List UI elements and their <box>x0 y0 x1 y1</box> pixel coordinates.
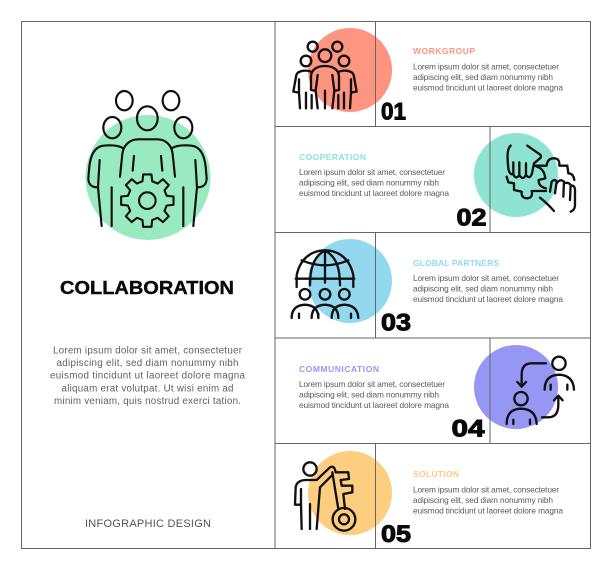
text block: euismod tincidunt ut laoreet dolore magna <box>413 82 563 92</box>
text block: adipiscing elit, sed diam nonummy nibh <box>299 390 439 400</box>
text block: euismod tincidunt ut laoreet dolore magna <box>299 188 449 198</box>
text block: euismod tincidunt ut laoreet dolore magna <box>413 506 563 516</box>
text block: Lorem ipsum dolor sit amet, consectetuer <box>413 273 559 283</box>
text block: description: euismod tincidunt ut laoreet dolore magna <box>50 371 246 382</box>
panel: 03 global partners <box>292 232 563 338</box>
number 03: 03 <box>381 310 411 336</box>
text block: adipiscing elit, sed diam nonummy nibh <box>299 178 439 188</box>
number 02: 02 <box>456 204 486 232</box>
text block: euismod tincidunt ut laoreet dolore magna <box>413 294 563 304</box>
panel: 04 communication <box>299 338 574 444</box>
icon: globe and people <box>292 239 392 323</box>
text block: Lorem ipsum dolor sit amet, consectetuer <box>413 484 559 494</box>
text block <box>299 167 449 198</box>
text block: adipiscing elit, sed diam nonummy nibh <box>413 495 553 505</box>
text block: description <box>50 346 246 407</box>
heading: WORKGROUP <box>413 46 475 56</box>
text block: description: aliquam erat volutpat. Ut wisi enim ad <box>62 383 234 394</box>
text block: description: adipiscing elit, sed diam nonummy nibh <box>56 358 238 369</box>
text block: description: Lorem ipsum dolor sit amet, consectetuer <box>53 346 243 356</box>
footer label: INFOGRAPHIC DESIGN <box>85 518 211 530</box>
panel: 02 cooperation <box>299 126 575 232</box>
text block: euismod tincidunt ut laoreet dolore magna <box>299 400 449 410</box>
text block: Lorem ipsum dolor sit amet, consectetuer <box>299 167 445 177</box>
text block <box>413 484 563 516</box>
text block: adipiscing elit, sed diam nonummy nibh <box>413 72 553 82</box>
text block <box>299 379 449 410</box>
icon: team with gear <box>86 91 210 240</box>
icon: person holding key <box>295 451 392 535</box>
text block: Lorem ipsum dolor sit amet, consectetuer <box>413 62 559 72</box>
text block <box>413 273 563 304</box>
heading: COMMUNICATION <box>299 364 379 374</box>
title: COLLABORATION <box>60 277 234 298</box>
icon: puzzle hands <box>474 133 575 217</box>
text block: adipiscing elit, sed diam nonummy nibh <box>413 284 553 294</box>
heading: GLOBAL PARTNERS <box>413 258 499 268</box>
number 04: 04 <box>452 416 485 442</box>
icon: people exchanging arrows <box>474 345 574 429</box>
panel: 01 workgroup <box>293 21 563 126</box>
panel: collaboration overview <box>50 91 246 530</box>
number 01: 01 <box>381 98 406 126</box>
icon: workgroup <box>293 28 392 112</box>
text block: Lorem ipsum dolor sit amet, consectetuer <box>299 379 445 389</box>
heading: COOPERATION <box>299 152 366 162</box>
number 05: 05 <box>381 521 411 548</box>
text block: description: minim veniam, quis nostrud exerci tation. <box>54 396 241 407</box>
panel: 05 solution <box>295 444 563 549</box>
heading: SOLUTION <box>413 469 459 479</box>
text block <box>413 62 563 92</box>
